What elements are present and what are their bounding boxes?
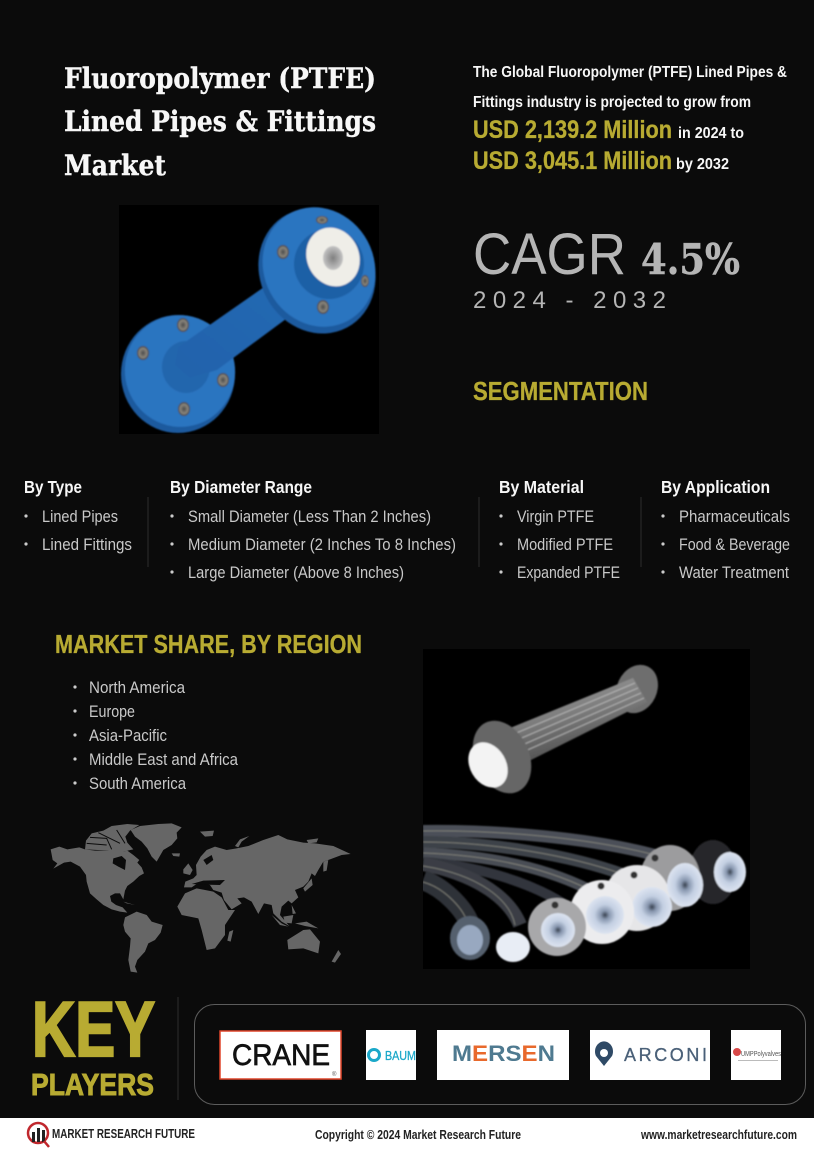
region list: [73, 679, 239, 793]
segment: by type: [24, 477, 132, 554]
region list: Europe: [89, 703, 135, 721]
footer: Copyright © 2024 Market Research Future: [315, 1127, 521, 1142]
market growth summary: by 2032: [676, 156, 729, 173]
segment: by diameter range: Large Diameter (Above 8 Inches): [188, 564, 404, 582]
hose bundle: [423, 831, 655, 925]
logo: Baum: [366, 1030, 416, 1080]
segment: by application: Food & Beverage: [679, 536, 790, 554]
segment: by diameter range: [170, 477, 456, 582]
market growth summary: USD 3,045.1 Million: [473, 147, 672, 175]
logo: Baum: BAUM: [385, 1048, 416, 1063]
region list: Asia-Pacific: [89, 727, 167, 745]
key players label: PLAYERS: [31, 1067, 154, 1102]
segment: by material: Modified PTFE: [517, 536, 613, 554]
segment: by application: [661, 477, 790, 582]
logo: UMP Polyvalves: UMPPolyvalves: [741, 1051, 781, 1058]
market growth summary: USD 2,139.2 Million: [473, 116, 672, 144]
image: braided steel lined hoses: [423, 649, 750, 969]
title: Fluoropolymer (PTFE): [64, 62, 376, 95]
segment: by application: Water Treatment: [679, 564, 789, 582]
CAGR value: [473, 222, 740, 314]
segment: by material: Expanded PTFE: [517, 564, 620, 582]
hose end fittings: [450, 840, 746, 962]
footer logo icon: [28, 1123, 49, 1147]
world map: [51, 823, 351, 973]
key players label: [31, 985, 155, 1102]
segment: by type: By Type: [24, 477, 82, 497]
segment: by diameter range: By Diameter Range: [170, 477, 312, 497]
footer: MARKET RESEARCH FUTURE: [52, 1126, 195, 1141]
title: Lined Pipes & Fittings: [64, 105, 376, 138]
region list: South America: [89, 775, 187, 793]
title: [64, 62, 376, 182]
title: Market: [64, 149, 166, 182]
segment: by diameter range: Medium Diameter (2 Inches To 8 Inches): [188, 536, 456, 554]
CAGR value: CAGR: [473, 222, 626, 287]
region list: Middle East and Africa: [89, 751, 239, 769]
segment: by type: Lined Fittings: [42, 536, 132, 554]
logo: Arconi: ARCONI: [624, 1045, 707, 1065]
CAGR value: 4.5%: [641, 235, 740, 284]
logo: Crane: [220, 1031, 341, 1079]
region list: North America: [89, 679, 186, 697]
bolt holes: [137, 216, 369, 416]
segment: by diameter range: Small Diameter (Less Than 2 Inches): [188, 508, 431, 526]
market growth summary: [473, 64, 787, 175]
logo: UMP Polyvalves: [731, 1030, 781, 1080]
heading: market share by region: MARKET SHARE, BY REGION: [55, 629, 362, 659]
segment: by type: Lined Pipes: [42, 508, 118, 526]
segment: by application: By Application: [661, 477, 770, 497]
CAGR value: 2024 - 2032: [473, 287, 666, 314]
braided hose: [467, 664, 659, 794]
key players label: KEY: [32, 985, 155, 1073]
logo: Crane: CRANE: [232, 1039, 330, 1072]
segment: by material: By Material: [499, 477, 584, 497]
footer: [0, 1118, 814, 1150]
segment: by application: Pharmaceuticals: [679, 508, 790, 526]
segment: by material: [499, 477, 620, 582]
logo: Arconi: [590, 1030, 710, 1080]
segment: by material: Virgin PTFE: [517, 508, 594, 526]
key players panel: [194, 1004, 806, 1104]
logo: Crane: ®: [332, 1071, 337, 1078]
market growth summary: in 2024 to: [678, 125, 744, 142]
logo: Mersen: [437, 1030, 569, 1080]
market growth summary: Fittings industry is projected to grow from: [473, 94, 751, 111]
logo: Mersen: MERSEN: [452, 1041, 555, 1066]
heading: segmentation: SEGMENTATION: [473, 376, 648, 406]
image: blue PTFE lined pipe: [109, 187, 397, 442]
